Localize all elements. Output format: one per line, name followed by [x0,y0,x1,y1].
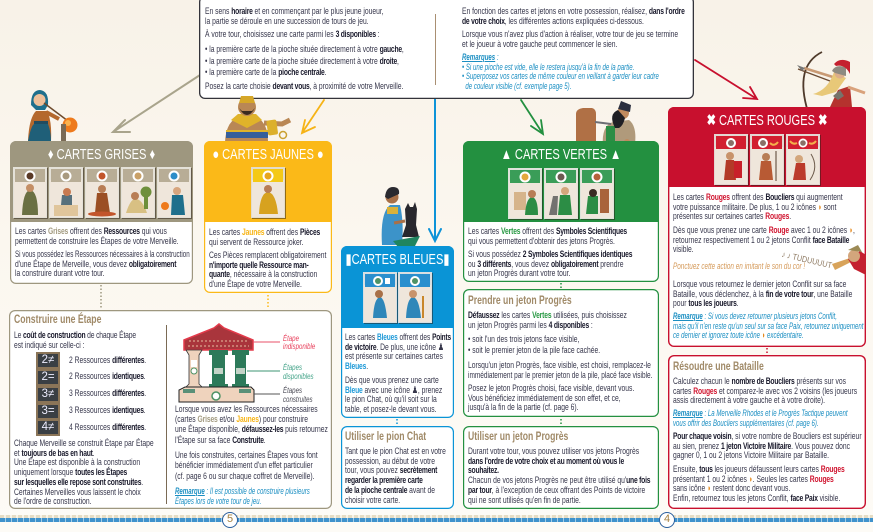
right column text: de votre choix, les différentes actions expliquées ci-dessous. [462,15,644,26]
effect text: Posez le jeton Progrès choisi, face visible, devant vous. [468,382,634,393]
card: archer [786,134,821,186]
header band [341,246,454,328]
figure: glass blower [28,90,78,141]
figure: green sculptor [576,101,636,141]
effect text: bénéficier immédiatement d'un effet particulier [175,459,313,470]
replace text: Lorsqu'un jeton Progrès, face visible, est choisi, remplacez-le [468,359,651,370]
card: wheel [544,168,579,220]
body text [345,446,446,504]
label: etape indisponible: indisponible [283,341,315,351]
progress condition text [468,248,632,278]
panel: construire une etape [9,310,332,509]
obligation text: la construire durant votre tour. [15,267,105,278]
page number 5 [222,512,238,528]
remarks: • Si une pioche est vide, elle le restera jusqu'à la fin de la partie. [462,61,634,72]
construction order text: Chaque Merveille se construit Étape par Étape [14,437,154,448]
description: de victoire. De plus, une icône ♟ [345,341,444,352]
cat pawn text: le pion Chat, où qu'il soit sur la [345,393,437,404]
header band [668,107,866,187]
battle trigger text: Bataille, vous déclenchez, à la fin de votre tour, une Bataille [673,288,852,299]
page number 4: 4 [664,513,670,525]
choice list: • la première carte de la pioche située directement à votre gauche, [205,43,404,54]
body text: possession, au début de votre [345,455,435,466]
card: compass [508,168,543,220]
card: papyrus [121,167,156,219]
construction order text: Certaines Merveilles vous laissent le choix [14,486,141,497]
column divider [166,325,167,504]
horn sound note: Ponctuez cette action en imitant le son du cor ! [673,260,805,271]
description: est présente sur certaines cartes [345,350,443,361]
conflict token text: visible. [673,243,694,254]
body text [468,446,650,504]
cost tile 3 different: 3≠ [42,388,54,400]
count text: assis directement à votre gauche et à votre droite). [673,394,825,405]
cost legend: 4 Ressources différentes. [69,421,146,432]
cat pawn text [345,374,442,414]
coin text: Ces Pièces remplacent obligatoirement [209,249,326,260]
remark: Remarque : Il est possible de construire plusieurs [175,485,310,496]
battle trigger text: pour tous les joueurs. [673,297,739,308]
horn player [832,245,866,275]
effect text [468,383,634,412]
description [468,225,627,246]
heading: ✖ CARTES ROUGES ✖ [707,112,827,129]
effect text [175,450,318,481]
obligation text: Si vous possédez les Ressources nécessaires à la construction [15,248,190,259]
discard text [673,464,845,503]
battle trigger text: Lorsque vous retournez le dernier jeton Conflit sur sa face [673,278,846,289]
card: soldier [714,134,749,186]
remark: vous offrir des Boucliers supplémentaires (cf. page 6). [673,417,819,428]
cost tile 2 different [36,352,60,368]
count text: cartes Rouges et comparez-le avec vos 2 voisins (les joueurs [673,385,857,396]
end of turn text: Lorsque vous n'avez plus d'action à réaliser, votre tour de jeu se termine [462,28,678,39]
description: Les cartes Vertes offrent des Symboles Scientifiques [468,225,627,236]
header band [204,141,332,222]
label: etapes disponibles: disponibles [283,370,314,380]
intro text: Le coût de construction de chaque Étape [14,329,136,340]
card: clay [13,167,48,219]
figure: king with gold ring [225,96,292,141]
body text: Chacun de vos jetons Progrès ne peut être utilisé qu'une fois [468,474,650,485]
choice list: • la première carte de la pioche centrale. [205,66,326,77]
obligation text: d'une Étape de Merveille, vous devez obligatoirement [15,258,176,269]
discard text: présentant 1 ou 2 icônes ◗. Seules les cartes Rouges [673,473,834,484]
description: qui vous permettent d'obtenir des jetons Progrès. [468,235,615,246]
cost tile 4 different: 4≠ [42,421,54,433]
label: etapes construites: construites [283,394,313,404]
label: etapes construites: Étapes [283,385,302,395]
count text [673,376,857,405]
cost tile 2 different: 2≠ [42,354,54,366]
intro text [468,310,627,329]
intro text [14,330,136,349]
remarks: Remarques : [462,51,499,62]
heading: ● CARTES JAUNES ● [212,146,324,163]
victory text: au sien, prenez 1 jeton Victoire Militaire. Vous pouvez donc [673,440,850,451]
construction order text: de l'ordre de construction. [14,495,91,506]
panel: cartes bleues [341,246,454,418]
label: etapes disponibles: Étapes [283,362,302,372]
wave stripe [0,518,873,522]
card: spearman [750,134,785,186]
temple diagram [183,324,329,404]
description: Les cartes Jaunes offrent des Pièces [209,226,320,237]
remark [673,311,863,340]
choice list: • la première carte de la pioche située directement à votre droite, [205,55,399,66]
figure: woman with cat [382,187,420,246]
placing text: Posez la carte choisie devant vous, à proximité de votre Merveille. [205,80,403,91]
cat pawn text: table, et posez-le devant vous. [345,403,437,414]
description [15,225,179,246]
choice list [205,43,404,77]
coin text: d'une Étape de votre Merveille. [209,278,302,289]
heading: ♦ CARTES GRISES ♦ [48,146,155,163]
discard text: sans icône ◗ restent donc devant vous. [673,482,790,493]
card: brick [85,167,120,219]
remark [175,486,310,505]
intro text: Défaussez les cartes Vertes utilisées, puis choisissez [468,309,627,320]
construction order text: uniquement lorsque toutes les Étapes [14,466,127,477]
cost tile 2 identical: 2= [41,371,55,383]
cost tile 4 different [36,419,60,436]
description: permettent de construire les Étapes de votre Merveille. [15,235,179,246]
remarks [462,51,659,91]
tuduuuut label: ♪ ♪ TUDUUUUT [781,249,833,270]
progress condition text: un jeton Progrès durant votre tour. [468,267,570,278]
description: Les cartes Bleues offrent des Points [345,331,451,342]
effect text: jusqu'à la fin de la partie (cf. page 6). [468,401,578,412]
left column text: la partie se déroule en une succession de tours de jeu. [205,15,369,26]
left column text: En sens horaire et en commençant par le plus jeune joueur, [205,5,384,16]
construction order text [14,438,154,506]
effect text: Vous bénéficiez immédiatement de son effet, et ce, [468,392,621,403]
card: stone [49,167,84,219]
card: tablet [580,168,615,220]
count text: Calculez chacun le nombre de Boucliers présents sur vos [673,375,846,386]
remarks: • Superposez vos cartes de même couleur en veillant à garder leur cadre [462,70,659,81]
build instruction text [175,404,328,445]
options list: • soit le premier jeton de la pile face cachée. [468,344,600,355]
footer wave band [0,515,873,522]
description: présentes sur certaines cartes Rouges. [673,210,791,221]
remark: Remarque : La Merveille Rhodes et le Progrès Tactique peuvent [673,407,848,418]
cost legend: 3 Ressources identiques. [69,404,146,415]
remark: Remarque : Si vous devez retourner plusieurs jetons Conflit, [673,310,837,321]
victory text: Pour chaque voisin, si votre nombre de Boucliers est supérieur [673,430,862,441]
end of turn text [462,28,678,49]
description [209,226,320,247]
cost legend: 2 Ressources différentes. [69,354,146,364]
effect text: (cf. page 6 ou sur chaque coffret de Merveille). [175,470,314,481]
options list: • soit l'un des trois jetons face visible, [468,333,579,344]
right column text [462,5,685,26]
panel: cartes jaunes [204,141,332,293]
choice text: À votre tour, choisissez une carte parmi les 3 disponibles : [205,28,380,39]
build instruction text: l'Étape sur sa face Construite. [175,434,266,445]
coin text: quante, nécessaire à la construction [209,268,317,279]
header band [10,141,193,222]
build instruction text: (cartes Grises et/ou Jaunes) pour construire [175,413,308,424]
body text: tour, vous pouvez secrètement [345,464,437,475]
card: coin [251,167,286,219]
construction order text: Une Étape est disponible à la construction [14,456,140,467]
panel: prendre un jeton progres [463,289,659,417]
remark [673,408,848,427]
coin text: n'importe quelle Ressource man- [209,259,309,270]
end of turn text: et le joueur à votre gauche peut commencer le sien. [462,38,617,49]
description: qui servent de Ressource joker. [209,236,304,247]
body text: par tour, à l'exception de ceux offrant des Points de victoire [468,484,645,495]
panel: resoudre une bataille [668,355,866,509]
discard text: Ensuite, tous les joueurs défaussent leurs cartes Rouges [673,463,845,474]
body text: de la pioche centrale avant de [345,484,435,495]
label: etape indisponible: Étape [283,333,299,343]
panel: cartes rouges [668,107,866,347]
body text: Durant votre tour, vous pouvez utiliser vos jetons Progrès [468,445,639,456]
build instruction text: une Étape disponible, défaussez-les puis retournez [175,423,328,434]
heading: ▮CARTES BLEUES▮ [346,251,449,268]
label: etape indisponible [283,334,315,350]
remarks: de couleur visible (cf. exemple page 5). [465,80,571,91]
heading: Utiliser le pion Chat [345,429,426,443]
body text: souhaitez. [468,464,499,475]
header band [463,141,659,222]
description: Les cartes Rouges offrent des Boucliers qui augmentent [673,191,843,202]
label: etapes construites [283,386,313,403]
coin text [209,249,326,289]
cost tile 3 different [36,386,60,402]
body text: choisir votre carte. [345,494,400,505]
conflict token text: retournez respectivement 1 ou 2 jetons Conflit face Bataille [673,234,849,245]
cost legend: 3 Ressources différentes. [69,387,146,398]
right column text: En fonction des cartes et jetons en votre possession, réalisez, dans l'ordre [462,5,685,16]
turn rules panel [199,0,694,99]
description: votre puissance militaire. De plus, 1 ou 2 icônes ◗ sont [673,201,836,212]
victory text [673,431,862,460]
heading: Utiliser un jeton Progrès [468,429,568,443]
options list [468,333,600,355]
description [673,191,843,221]
effect text: Une fois construites, certaines Étapes vous font [175,449,318,460]
left column text [205,5,384,26]
body text: Tant que le pion Chat est en votre [345,445,446,456]
description: Les cartes Grises offrent des Ressources qui vous [15,225,167,236]
label: etapes disponibles [283,363,314,380]
panel: utiliser un jeton progres [463,426,659,509]
cat pawn text: Bleue avec une icône ♟, prenez [345,384,442,395]
card: blue with cat icon [363,272,398,324]
column divider [435,14,436,85]
figure: archer [797,51,866,107]
cost legend [69,352,146,436]
panel: utiliser le pion chat [341,426,454,509]
page number 4 [659,512,675,528]
cost tile 2 identical [36,369,60,386]
intro text: est indiqué sur celle-ci : [14,339,85,350]
obligation text [15,248,190,278]
battle trigger text [673,278,852,308]
progress condition text: Si vous possédez 2 Symboles Scientifiques identiques [468,248,632,259]
figure: horn player with tuduuuut [781,245,866,275]
replace text [468,360,660,379]
heading: ▲ CARTES VERTES ▲ [501,146,621,163]
card: glass [157,167,192,219]
remark: mais qu'il n'en reste qu'un seul sur sa face Paix, retournez uniquement [673,320,863,331]
conflict token text [673,224,855,254]
heading: Construire une Étape [14,312,101,326]
victory text: gagner 0, 1 ou 2 jetons Victoire Militaire par Bataille. [673,449,829,460]
body text: qui ne sont utilisés qu'en fin de partie. [468,494,581,505]
page number 5: 5 [227,513,233,525]
replace text: immédiatement par le premier jeton de la pile, placé face visible. [468,369,652,380]
construction order text: et toujours de bas en haut. [14,447,95,458]
intro text: un jeton Progrès parmi les 4 disponibles : [468,319,593,330]
conflict token text: Dès que vous prenez une carte Rouge avec 1 ou 2 icônes ◗, [673,224,855,235]
progress condition text: ou 3 différents, vous devez obligatoirement prendre [468,258,624,269]
remark: ce dernier et ignorez toute icône ◗ excédentaire. [673,329,804,340]
remark: Étapes lors de votre tour de jeu. [175,495,261,506]
heading: Résoudre une Bataille [673,359,764,373]
cat pawn text: Dès que vous prenez une carte [345,374,439,385]
description: Bleues. [345,360,368,371]
body text: regarder la première carte [345,474,423,485]
build instruction text: Lorsque vous avez les Ressources nécessaires [175,403,318,414]
panel: cartes vertes [463,141,659,282]
cost legend: 2 Ressources identiques. [69,370,146,381]
description [345,331,451,371]
cost tile 3 identical [36,403,60,420]
discard text: Enfin, retournez tous les jetons Conflit, face Paix visible. [673,492,840,503]
body text: dans l'ordre de votre choix et au moment où vous le [468,455,624,466]
panel: cartes grises [10,141,193,284]
construction order text: sur lesquelles elle repose sont construites. [14,476,143,487]
heading: Prendre un jeton Progrès [468,293,572,307]
cost tile 3 identical: 3= [41,405,55,417]
card: blue [398,272,433,324]
